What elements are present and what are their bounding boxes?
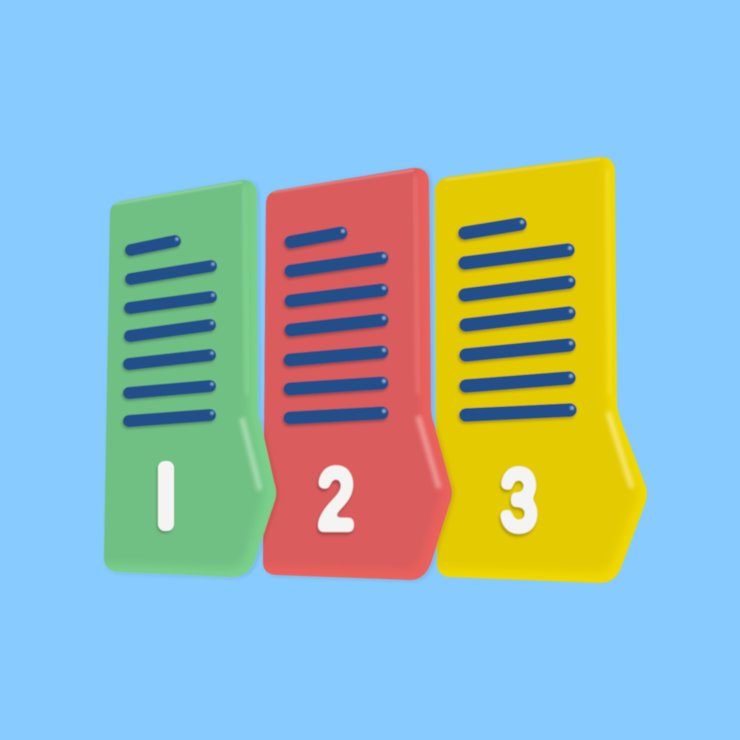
number 1: 1 [139, 443, 193, 550]
panel: yellow tab 3 [425, 150, 647, 583]
text lines: red [290, 229, 386, 418]
panel: red tab 2 [250, 150, 452, 580]
number 2: 2 [318, 452, 354, 546]
infographic: three numbered 3D tabs [103, 156, 647, 584]
panel: green tab 1 [103, 179, 279, 579]
text lines: green [129, 237, 215, 421]
number 3: 3 [501, 453, 537, 547]
text lines: yellow [465, 220, 574, 415]
number 1 [156, 460, 175, 534]
